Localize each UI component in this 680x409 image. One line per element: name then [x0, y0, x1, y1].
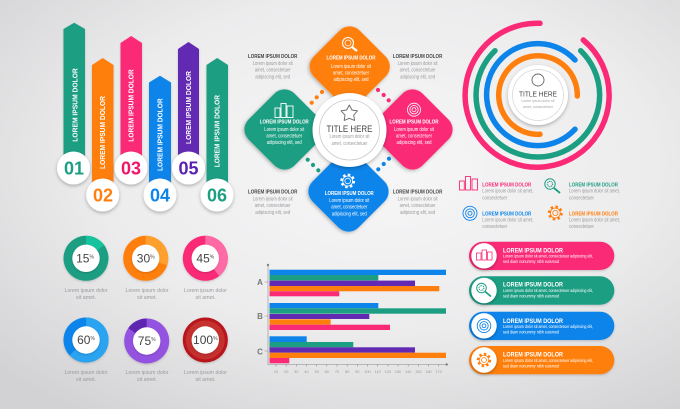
legend: pink text: LOREM IPSUM DOLOR — [482, 182, 531, 188]
ring: green — [476, 51, 600, 157]
icon: bars — [275, 104, 293, 118]
donut 100% — [183, 318, 228, 362]
arrow 01 — [64, 23, 85, 165]
chart axes — [264, 264, 448, 366]
x axis labels: 160 — [425, 370, 432, 374]
donut 75% — [124, 318, 169, 364]
donut 75%: % — [151, 337, 156, 343]
group B bars — [270, 303, 446, 330]
diamond: blue: amet, consectetuer — [331, 204, 368, 210]
donut captions: sit amet. — [196, 295, 216, 301]
side text: top left: LOREM IPSUM DOLOR — [248, 54, 297, 60]
arrow 02 — [92, 58, 114, 190]
panel: concentric ring chart — [465, 23, 609, 167]
x axis labels: 150 — [415, 370, 422, 374]
diamond: pink — [367, 84, 458, 175]
donut captions: sit amet. — [76, 377, 96, 383]
dots: blue — [376, 157, 391, 171]
x axis labels: 170 — [436, 370, 442, 374]
diamond: green: LOREM IPSUM DOLOR — [260, 120, 309, 126]
donut captions: sit amet. — [76, 295, 96, 301]
side text: top right: LOREM IPSUM DOLOR — [393, 54, 442, 60]
x axis labels: 60 — [325, 370, 329, 374]
diamond: green: Lorem ipsum dolor sit — [264, 127, 305, 133]
group C bars — [270, 336, 446, 363]
pill: orange: sed diam nonummy nibh euismod — [503, 364, 560, 368]
diamond: orange: LOREM IPSUM DOLOR — [326, 56, 376, 62]
legend: orange text: Lorem ipsum dolor sit amet, — [569, 217, 620, 223]
x axis labels: 100 — [364, 370, 371, 374]
diamond: blue: Lorem ipsum dolor sit — [329, 198, 370, 204]
ring centre: amet, consectetuer — [523, 104, 554, 109]
side text: bottom right: adipiscing elit, sed — [400, 210, 435, 216]
legend: orange text: consectetuer — [569, 224, 594, 230]
donut captions: Lorem ipsum dolor — [126, 370, 169, 376]
badge 05 — [172, 152, 205, 184]
diamond: green: adipiscing elit, sed — [267, 140, 302, 146]
ring: orange — [499, 56, 577, 134]
legend: orange text — [569, 212, 620, 230]
badge 01: 01 — [64, 158, 84, 178]
x axis labels: 40 — [304, 370, 309, 374]
dots: green — [306, 158, 320, 172]
legend: orange text: LOREM IPSUM DOLOR — [569, 212, 618, 218]
diamond: pink: adipiscing elit, sed — [396, 140, 432, 146]
badge 04: 04 — [150, 186, 170, 206]
pill: green: sed diam nonummy nibh euismod — [503, 294, 560, 298]
category labels: A — [257, 278, 263, 287]
donut 60%: 60 — [77, 333, 90, 347]
side text: top right: adipiscing elit, sed — [400, 74, 435, 80]
diamond: orange: Lorem ipsum dolor sit — [331, 64, 372, 70]
diamond: green: amet, consectetuer — [266, 134, 303, 140]
side text: bottom left: LOREM IPSUM DOLOR — [248, 190, 297, 196]
badge 02: 02 — [93, 186, 113, 206]
arrow 02: LOREM IPSUM DOLOR — [100, 96, 107, 169]
legend: pink text: consectetuer — [482, 195, 508, 201]
donut 15% — [64, 236, 108, 281]
arrow 05 — [178, 42, 199, 165]
category labels — [257, 278, 263, 356]
x axis labels: 80 — [345, 370, 349, 374]
diamond: pink: LOREM IPSUM DOLOR — [390, 120, 438, 126]
ring: blue — [487, 44, 575, 146]
diamond: green — [239, 84, 330, 175]
donut 45%: % — [210, 254, 215, 260]
arrow 06 — [206, 58, 228, 190]
diamond: pink: amet, consectetuer — [396, 134, 432, 140]
legend: green text — [569, 182, 620, 201]
diamond: pink: Lorem ipsum dolor sit — [394, 127, 435, 133]
badge 06: 06 — [207, 186, 227, 206]
legend icon: gear — [549, 207, 561, 219]
x axis labels: 130 — [395, 370, 401, 374]
donut 100%: 100 — [193, 333, 213, 347]
side text: top left: amet, consectetuer — [255, 68, 291, 74]
pill: pink — [469, 242, 614, 270]
legend: green text: LOREM IPSUM DOLOR — [569, 182, 618, 188]
diamond: orange — [304, 21, 396, 112]
ring: pink — [465, 23, 609, 167]
arrow 01: LOREM IPSUM DOLOR — [72, 68, 79, 142]
donut 15%: % — [89, 254, 94, 260]
pill: orange — [469, 346, 614, 374]
legend: blue text: consectetuer — [482, 224, 508, 230]
side text: top right: Lorem ipsum dolor sit — [398, 61, 438, 67]
diamond: blue — [303, 146, 394, 237]
legend: blue text — [482, 212, 533, 230]
centre circle — [312, 93, 386, 167]
donut captions: Lorem ipsum dolor — [126, 288, 169, 294]
donut 30%: 30 — [137, 252, 150, 266]
arrow 05: LOREM IPSUM DOLOR — [186, 71, 193, 144]
x axis labels: 20 — [284, 370, 288, 374]
pill: green: Lorem ipsum dolor sit amet, consectetuer adipiscing elit, — [503, 288, 593, 293]
side text: bottom left: amet, consectetuer — [255, 203, 291, 209]
x axis labels: 110 — [375, 370, 381, 374]
donut captions: sit amet. — [137, 377, 157, 383]
badge 03 — [114, 152, 148, 184]
legend icon: target — [463, 206, 477, 220]
pill: blue — [469, 312, 614, 340]
legend: green text: Lorem ipsum dolor sit amet, — [569, 188, 620, 194]
donut 100%: % — [213, 336, 218, 342]
centre circle: TITLE HERE — [326, 124, 372, 135]
arrow 06: LOREM IPSUM DOLOR — [215, 95, 222, 167]
donut captions — [64, 288, 227, 383]
diamond: blue: LOREM IPSUM DOLOR — [325, 191, 374, 197]
icon: magnifier — [342, 38, 357, 51]
x axis labels: 30 — [294, 370, 298, 374]
panel: numbered arrow columns — [57, 23, 234, 212]
arrow 03: LOREM IPSUM DOLOR — [129, 69, 136, 142]
panel: pill list — [469, 242, 614, 374]
side text: top right: amet, consectetuer — [400, 68, 436, 74]
x axis labels — [274, 370, 442, 374]
badge 03: 03 — [121, 158, 141, 178]
side text: bottom left: Lorem ipsum dolor sit — [253, 196, 293, 202]
legend icon: bars — [460, 176, 478, 190]
donut 30%: % — [150, 254, 155, 260]
legend: blue text: Lorem ipsum dolor sit amet, — [482, 217, 533, 223]
donut 45% — [183, 236, 228, 281]
pill: pink: LOREM IPSUM DOLOR — [503, 248, 563, 254]
legend: blue text: LOREM IPSUM DOLOR — [482, 212, 531, 218]
arrow 04 — [149, 76, 171, 190]
badge 02 — [86, 178, 119, 212]
donut captions: Lorem ipsum dolor — [184, 288, 227, 294]
donut captions: sit amet. — [137, 295, 157, 301]
x axis labels: 10 — [274, 370, 278, 374]
side text: bottom left: adipiscing elit, sed — [255, 210, 290, 216]
x axis labels: 70 — [335, 370, 339, 374]
side text: bottom right: Lorem ipsum dolor sit — [398, 196, 438, 202]
panel: percentage donuts — [64, 236, 228, 383]
bar chart — [257, 264, 448, 374]
legend: green text: consectetuer — [569, 195, 594, 201]
pill: orange: Lorem ipsum dolor sit amet, consectetuer adipiscing elit, — [503, 358, 593, 363]
diamond: blue: adipiscing elit, sed — [332, 212, 367, 218]
side text: bottom left — [248, 190, 297, 216]
pill: blue: LOREM IPSUM DOLOR — [503, 318, 563, 325]
donut 75%: 75 — [138, 334, 151, 348]
badge 04 — [144, 178, 176, 212]
panel: ring legend — [460, 176, 620, 230]
donut 60% — [64, 317, 109, 362]
pill: green — [469, 276, 614, 305]
side text: bottom right: LOREM IPSUM DOLOR — [393, 190, 442, 196]
donut 15%: 15 — [76, 252, 89, 266]
x axis labels: 90 — [355, 370, 360, 374]
donut 45%: 45 — [196, 252, 210, 266]
category labels: B — [257, 312, 263, 321]
arrow 03 — [120, 36, 142, 165]
donut captions: Lorem ipsum dolor — [184, 370, 227, 376]
group A bars — [270, 270, 446, 296]
donut 60%: % — [90, 336, 95, 342]
dots: orange — [310, 90, 324, 105]
badge 06 — [200, 178, 234, 212]
icon: gear — [342, 175, 354, 187]
side text: top left — [248, 54, 297, 80]
ring centre — [508, 65, 568, 125]
pill: green: LOREM IPSUM DOLOR — [503, 282, 563, 288]
dots: pink — [376, 88, 391, 102]
category labels: C — [257, 348, 263, 356]
x axis labels: 120 — [385, 370, 391, 374]
panel: diamond diagram — [239, 21, 458, 237]
pill: pink: sed diam nonummy nibh euismod — [503, 259, 560, 264]
legend: pink text — [482, 182, 533, 201]
donut captions: sit amet. — [196, 377, 216, 383]
donut 30% — [123, 236, 168, 281]
ring centre: TITLE HERE — [519, 90, 557, 98]
side text: bottom right: amet, consectetuer — [400, 203, 436, 209]
side text: top left: Lorem ipsum dolor sit — [253, 61, 293, 67]
pill: orange: LOREM IPSUM DOLOR — [503, 352, 563, 358]
icon: target — [408, 103, 420, 116]
side text: bottom right — [393, 190, 442, 216]
diamond: orange: adipiscing elit, sed — [334, 77, 369, 83]
legend icon: magnifier — [545, 179, 560, 193]
donut captions: Lorem ipsum dolor — [64, 288, 108, 294]
diamond: orange: amet, consectetuer — [333, 70, 369, 76]
legend: pink text: Lorem ipsum dolor sit amet, — [482, 188, 533, 194]
badge 01 — [57, 152, 90, 184]
donut captions: Lorem ipsum dolor — [64, 370, 108, 376]
centre circle: amet, consectetuer — [332, 141, 368, 147]
pill: pink: Lorem ipsum dolor sit amet, consectetuer adipiscing elit, — [503, 254, 593, 258]
centre circle: Lorem ipsum dolor sit — [330, 134, 370, 140]
pill: blue: Lorem ipsum dolor sit amet, consectetuer adipiscing elit, — [503, 324, 593, 329]
side text: top right — [393, 54, 442, 80]
x axis labels: 50 — [315, 370, 319, 374]
arrow 04: LOREM IPSUM DOLOR — [158, 98, 164, 171]
side text: top left: adipiscing elit, sed — [255, 74, 290, 80]
pill: blue: sed diam nonummy nibh euismod — [503, 330, 560, 334]
x axis labels: 140 — [405, 370, 411, 374]
ring centre: Lorem ipsum dolor sit — [522, 98, 555, 103]
badge 05: 05 — [178, 158, 199, 178]
